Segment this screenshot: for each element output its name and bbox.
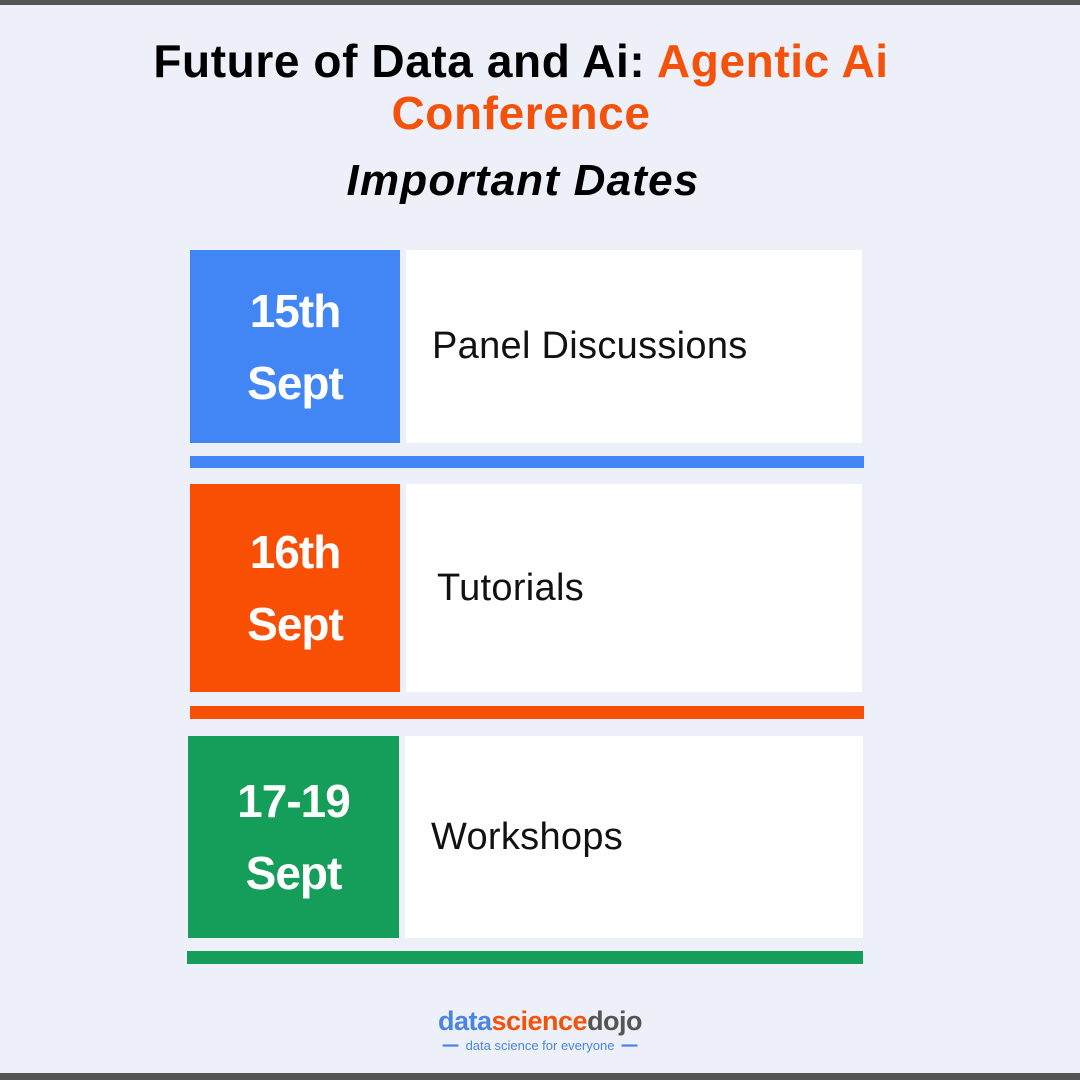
date: 15th Sept: 15th — [250, 284, 340, 336]
date: 16th Sept — [190, 484, 400, 692]
date: 17-19 Sept: 17-19 — [237, 775, 350, 827]
row 2 — [190, 484, 864, 719]
subtitle: Important Dates — [347, 156, 699, 205]
label: Workshops: Workshops — [431, 816, 623, 858]
date: 15th Sept: Sept — [247, 356, 343, 408]
date: 15th Sept — [190, 250, 400, 443]
row 3 — [187, 736, 863, 964]
date: 16th Sept: 16th — [250, 526, 340, 578]
date: 17-19 Sept: Sept — [246, 847, 341, 899]
row 1 — [190, 250, 864, 468]
logo — [438, 1006, 642, 1053]
label: Panel Discussions — [406, 250, 862, 443]
title: Conference — [391, 87, 651, 139]
date: 16th Sept: Sept — [247, 598, 343, 650]
label: Tutorials — [406, 484, 862, 692]
logo: datasciencedojo — [438, 1006, 642, 1036]
label: Panel Discussions: Panel Discussions — [432, 325, 748, 367]
logo: ━━ data science for everyone ━━ — [443, 1038, 637, 1053]
title — [153, 35, 889, 139]
label: Workshops — [405, 736, 863, 938]
date: 17-19 Sept — [188, 736, 399, 938]
label: Tutorials: Tutorials — [437, 566, 584, 608]
title: Future of Data and Ai: Agentic Ai — [153, 35, 889, 87]
